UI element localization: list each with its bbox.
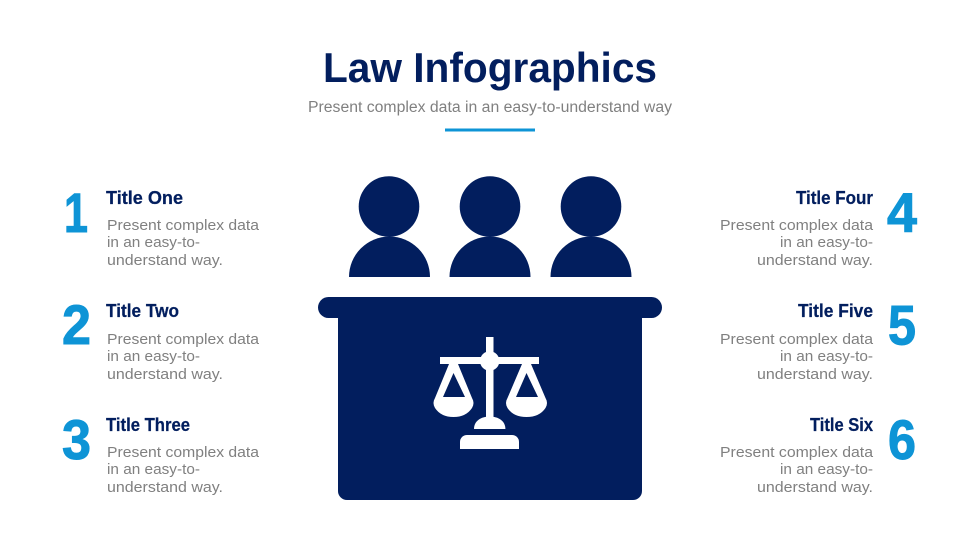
item 6: 6: [888, 408, 916, 471]
item 2: [62, 293, 260, 383]
item 1: 1: [64, 181, 88, 244]
item 3: Present complex data: [107, 444, 260, 461]
subtitle: Present complex data in an easy-to-understand way: [308, 99, 672, 116]
item 4: understand way.: [757, 252, 873, 269]
item 3: 3: [62, 408, 91, 471]
item 2: Title Two: [106, 301, 179, 321]
item 2: Present complex data: [107, 331, 260, 348]
item 5: in an easy-to-: [780, 348, 873, 365]
item 2: in an easy-to-: [107, 348, 200, 365]
item 6: [720, 408, 916, 496]
item 1: Title One: [106, 188, 183, 208]
item 6: Title Six: [810, 415, 873, 435]
item 1: in an easy-to-: [107, 234, 200, 251]
item 6: understand way.: [757, 479, 873, 496]
icon: scales of justice: [434, 337, 547, 449]
item 6: Present complex data: [720, 444, 874, 461]
item 5: 5: [888, 294, 916, 356]
item 4: [720, 181, 917, 269]
icon: three jurors: [349, 176, 632, 277]
item 5: [720, 294, 916, 383]
item 1: understand way.: [107, 252, 223, 269]
item 3: [62, 408, 260, 496]
item 5: Present complex data: [720, 331, 874, 348]
item 4: Title Four: [796, 188, 873, 208]
item 5: Title Five: [798, 301, 873, 321]
item 6: in an easy-to-: [780, 461, 873, 478]
item 2: understand way.: [107, 366, 223, 383]
item 2: 2: [62, 293, 91, 356]
item 3: understand way.: [107, 479, 223, 496]
item 1: Present complex data: [107, 217, 260, 234]
item 3: in an easy-to-: [107, 461, 200, 478]
icon: judge desk: [318, 297, 662, 500]
item 4: 4: [887, 181, 917, 244]
item 5: understand way.: [757, 366, 873, 383]
item 1: [64, 181, 260, 269]
item 3: Title Three: [106, 415, 190, 435]
title underline: [445, 128, 535, 132]
item 4: in an easy-to-: [780, 234, 873, 251]
title: Law Infographics: [323, 44, 657, 91]
item 4: Present complex data: [720, 217, 874, 234]
